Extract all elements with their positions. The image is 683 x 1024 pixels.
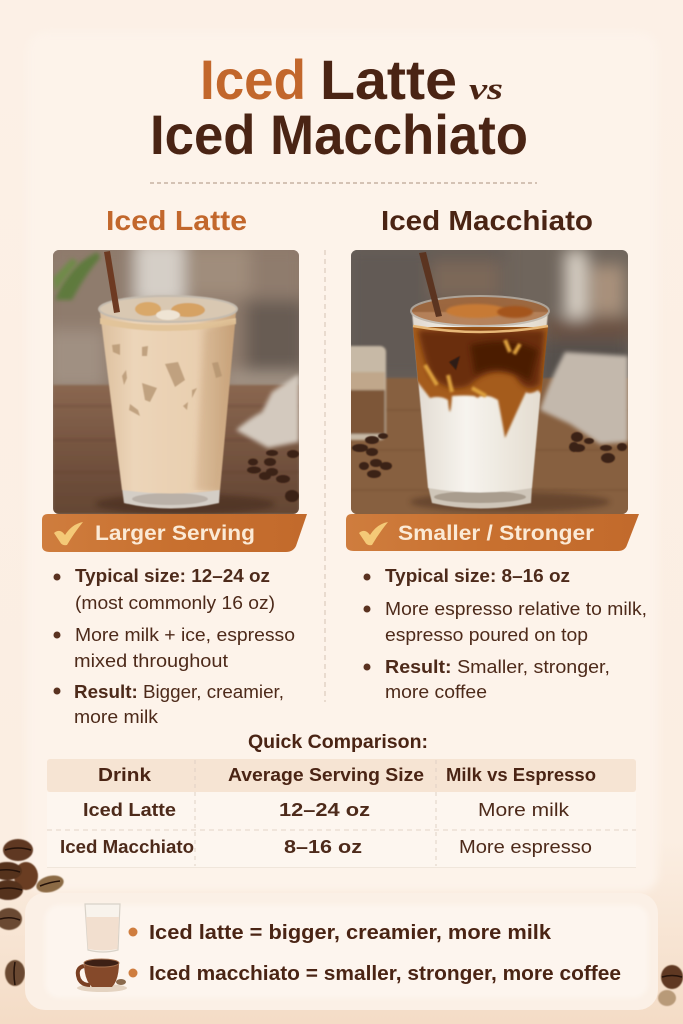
icon: coffee cup	[77, 959, 127, 992]
summary card: Iced latte = bigger, creamier, more milk	[149, 922, 552, 944]
title: Latte	[320, 48, 457, 111]
beans	[352, 432, 627, 478]
glass	[412, 312, 548, 508]
comparison table: More milk	[478, 800, 570, 820]
straw	[104, 251, 120, 313]
icon: milk glass	[85, 904, 120, 952]
comparison table: Average Serving Size	[228, 765, 424, 785]
photo: iced macchiato	[345, 245, 635, 518]
title: Iced	[200, 48, 306, 111]
beans	[247, 450, 299, 502]
straw	[419, 252, 442, 317]
ribbon: smaller / stronger	[346, 514, 639, 551]
bullets: iced latte: mixed throughout	[74, 651, 228, 671]
glass	[99, 296, 237, 508]
title	[150, 48, 528, 166]
heading: iced latte: Iced Latte	[106, 205, 247, 236]
main panel	[27, 32, 658, 892]
comparison table: More espresso	[459, 837, 592, 857]
ribbon: larger serving: Larger Serving	[95, 522, 255, 545]
title: Iced Macchiato	[150, 103, 528, 166]
icon: check	[359, 522, 388, 545]
bullets: iced macchiato: More espresso relative to milk,	[385, 599, 647, 619]
cloth	[540, 352, 628, 444]
bullets: iced latte: More milk + ice, espresso	[75, 625, 295, 645]
bullets: iced latte: Result: Bigger, creamier,	[74, 682, 284, 702]
summary card	[25, 893, 658, 1010]
jar	[345, 346, 386, 440]
bullets: iced macchiato: Typical size: 8–16 oz	[385, 566, 570, 586]
summary card: Iced macchiato = smaller, stronger, more coffee	[149, 963, 621, 985]
cloth	[236, 374, 299, 448]
bullets: iced latte: (most commonly 16 oz)	[75, 593, 275, 613]
heading: iced macchiato: Iced Macchiato	[381, 205, 593, 236]
comparison table: Iced Macchiato	[60, 837, 194, 857]
comparison table: Milk vs Espresso	[446, 765, 596, 785]
ice	[112, 344, 222, 416]
decorative coffee beans	[0, 839, 683, 1006]
ribbon: larger serving	[42, 514, 307, 552]
bullets: iced macchiato: more coffee	[385, 682, 487, 702]
bullets: iced macchiato: espresso poured on top	[385, 625, 588, 645]
comparison table: Drink	[98, 765, 152, 785]
icon: check	[54, 522, 83, 545]
bullets: iced latte: Typical size: 12–24 oz	[75, 566, 270, 586]
title: vs	[469, 71, 503, 106]
bullets: iced latte	[54, 566, 295, 727]
bullets: iced latte: more milk	[74, 707, 159, 727]
bullets: iced macchiato	[364, 566, 647, 702]
heading: quick comparison: Quick Comparison:	[248, 732, 428, 753]
comparison table: 8–16 oz	[284, 837, 362, 857]
photo: iced latte	[45, 240, 305, 514]
comparison table: 12–24 oz	[279, 800, 370, 820]
comparison table: Iced Latte	[83, 800, 176, 820]
bullets: iced macchiato: Result: Smaller, stronger,	[385, 657, 610, 677]
comparison table	[47, 759, 636, 868]
ribbon: smaller / stronger: Smaller / Stronger	[398, 522, 594, 545]
